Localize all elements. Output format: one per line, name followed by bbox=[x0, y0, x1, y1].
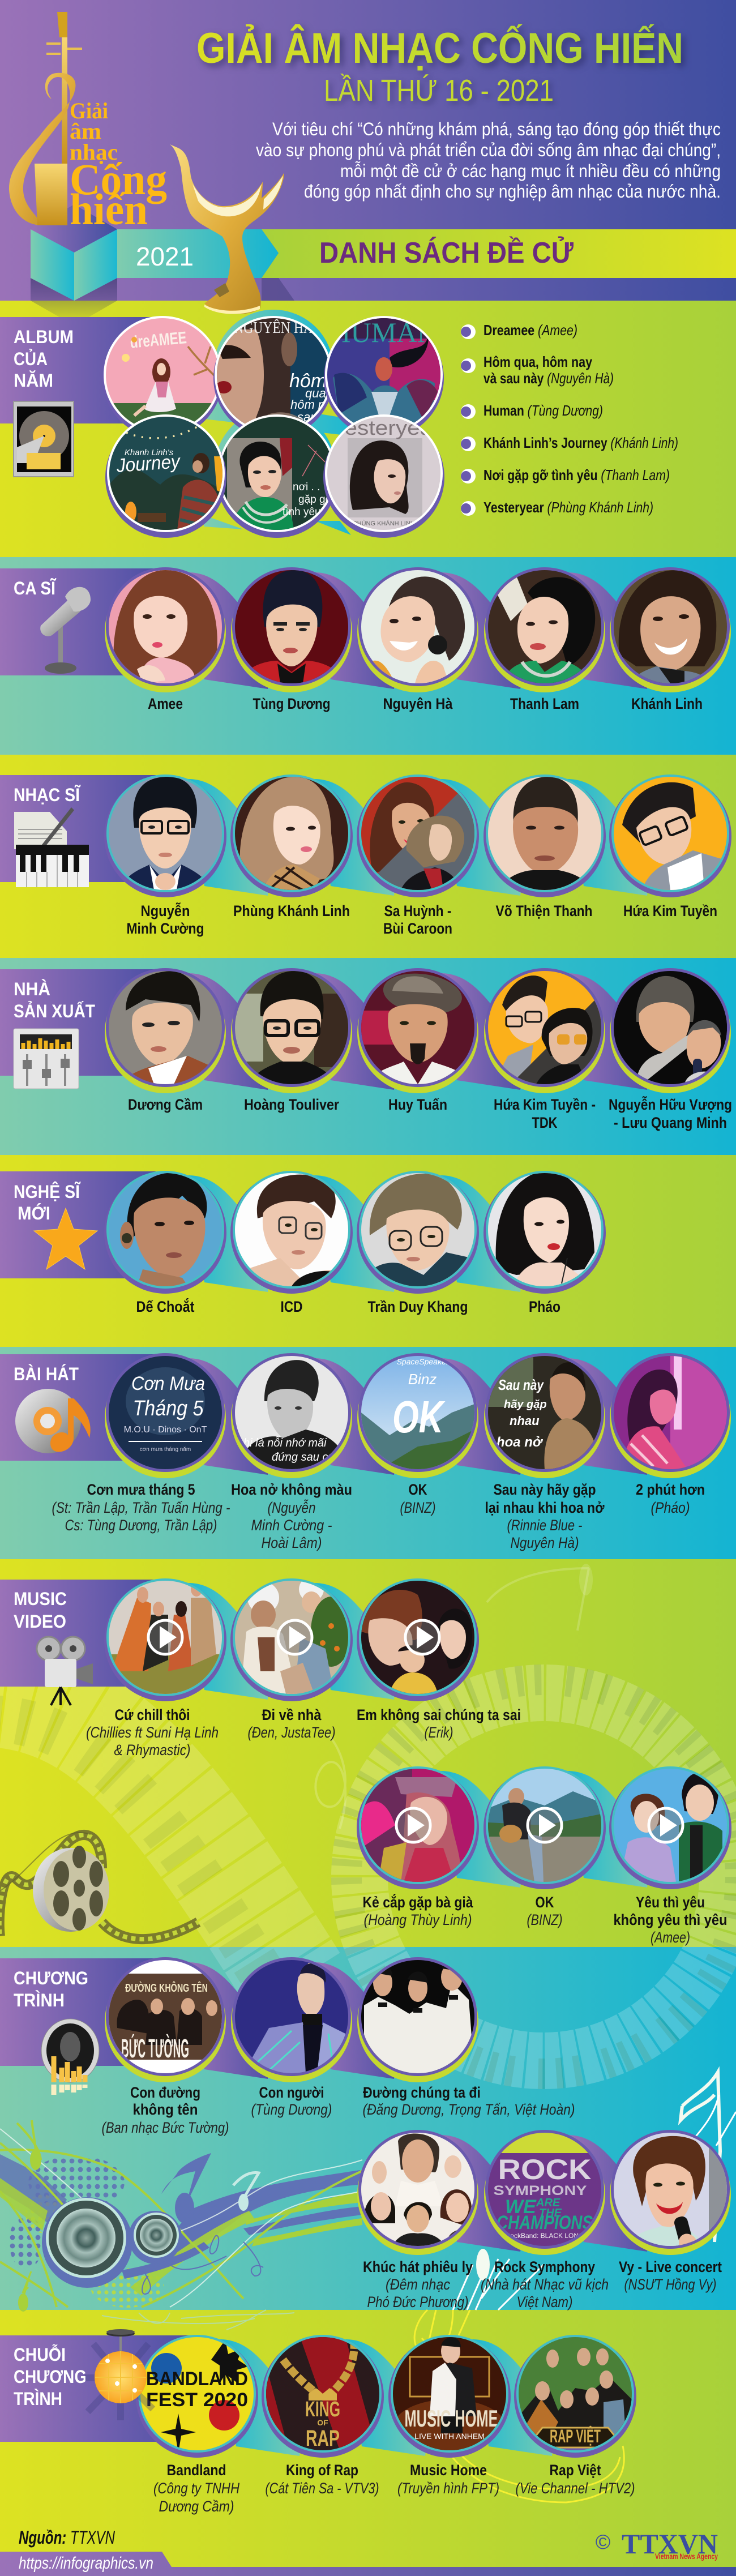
singer names: Khánh Linh bbox=[631, 695, 703, 712]
portrait: Nguyễn Minh Cường bbox=[104, 774, 226, 897]
heading bbox=[14, 1968, 88, 2010]
nominee list: Khánh Linh’s Journey (Khánh Linh) bbox=[483, 434, 678, 451]
new artist names: ICD bbox=[281, 1298, 302, 1315]
series titles: Music Home bbox=[410, 2462, 487, 2479]
producer names: TDK bbox=[532, 1114, 558, 1131]
album cover: Nơi gặp gỡ tình yêu: gặp gỡ bbox=[298, 494, 332, 506]
album cover: Nơi gặp gỡ tình yêu: nơi . . bbox=[293, 481, 320, 493]
icon: mixer bbox=[14, 1029, 79, 1089]
cover: OK bbox=[357, 1353, 478, 1478]
connectors between portraits bbox=[188, 973, 652, 1090]
poster: Bandland: FEST 2020 bbox=[146, 2389, 248, 2411]
music video titles: (Chillies ft Suni Hạ Linh bbox=[86, 1724, 219, 1741]
composer names: Bùi Caroon bbox=[383, 920, 452, 937]
cover: Sau này hãy gặp lại nhau khi hoa nở: hãy gặp bbox=[504, 1398, 547, 1411]
cover: Sau này hãy gặp lại nhau khi hoa nở: hoa nở bbox=[497, 1435, 544, 1450]
section ribbon bbox=[0, 969, 156, 1076]
music video titles: (Amee) bbox=[651, 1929, 690, 1946]
panel: programme series bbox=[0, 2310, 736, 2567]
nominee list: Human (Tùng Dương) bbox=[483, 402, 603, 419]
album cover: Dreamee: dreAMEE bbox=[129, 328, 187, 352]
award logo: Giải bbox=[70, 98, 108, 123]
poster: Con đường không tên bbox=[105, 1957, 226, 2082]
composer names: Võ Thiện Thanh bbox=[496, 902, 592, 919]
portrait: Võ Thiện Thanh bbox=[483, 774, 606, 897]
portrait: Hoàng Touliver bbox=[231, 968, 352, 1093]
poster: Rock Symphony: ROCK bbox=[498, 2154, 591, 2185]
album cover: Dreamee bbox=[104, 316, 218, 428]
decorative swirl and speakers at the bottom of the programme band bbox=[0, 2072, 736, 2502]
icon: gold record plaque bbox=[14, 401, 74, 477]
panel: header bbox=[0, 0, 736, 326]
album cover: Hôm qua, hôm nay và sau này: NGUYÊN HÀ bbox=[234, 319, 314, 337]
panel: producers bbox=[0, 958, 736, 1155]
year: 2021 bbox=[136, 242, 194, 271]
panel: songs bbox=[0, 1347, 736, 1559]
panel: programmes bbox=[0, 1947, 736, 2310]
heading: NHÀ bbox=[14, 979, 50, 999]
poster: Bandland: BANDLAND bbox=[146, 2368, 248, 2390]
heading: CHUỖI bbox=[14, 2344, 66, 2365]
composer names: Minh Cường bbox=[127, 920, 204, 937]
song titles: (St: Trần Lập, Trần Tuấn Hùng - bbox=[52, 1499, 230, 1516]
section ribbon bbox=[0, 2335, 192, 2442]
album cover: Hôm qua, hôm nay và sau này: qua bbox=[305, 386, 326, 400]
music video titles: (BINZ) bbox=[527, 1911, 563, 1928]
album cover: Khánh Linh's Journey: Khanh Linh's bbox=[125, 448, 174, 457]
icon: film camera bbox=[37, 1637, 93, 1705]
producer names: Hứa Kim Tuyền - bbox=[494, 1096, 596, 1113]
series titles: (Công ty TNHH bbox=[153, 2480, 239, 2497]
icon: sheet music and piano bbox=[14, 807, 89, 887]
new artist names bbox=[136, 1298, 560, 1315]
album cover: Yesteryear bbox=[323, 414, 444, 538]
portrait: ICD bbox=[230, 1171, 353, 1294]
cover: Hoa nở không màu: hi là nỗi nhớ mãi bbox=[243, 1436, 327, 1449]
section ribbon bbox=[0, 1354, 156, 1461]
film reel and film strip bbox=[0, 1833, 198, 1939]
poster: Con đường không tên: ĐƯỜNG KHÔNG TÊN bbox=[125, 1981, 208, 1995]
song titles: Sau này hãy gặp bbox=[494, 1481, 596, 1498]
website address: https://infographics.vn bbox=[19, 2554, 153, 2573]
poster: Bandland bbox=[136, 2335, 258, 2458]
programme titles: (Nhà hát Nhạc vũ kịch bbox=[481, 2276, 609, 2293]
album cover: Nơi gặp gỡ tình yêu bbox=[221, 414, 331, 538]
producer names bbox=[128, 1096, 732, 1131]
panel: composers bbox=[0, 774, 731, 936]
composer names: Phùng Khánh Linh bbox=[233, 902, 350, 919]
heading: CHƯƠNG bbox=[14, 2367, 87, 2387]
section ribbon bbox=[0, 1580, 156, 1687]
music video titles: Cứ chill thôi bbox=[114, 1706, 190, 1723]
series titles bbox=[153, 2462, 635, 2515]
TTXVN logo: TTXVN bbox=[622, 2528, 718, 2560]
singer names: Thanh Lam bbox=[510, 695, 579, 712]
section ribbon bbox=[0, 568, 156, 675]
cover: Hoa nở không màu bbox=[231, 1353, 352, 1478]
award logo: Cống bbox=[70, 155, 167, 204]
music video titles: Em không sai chúng ta sai bbox=[357, 1706, 521, 1723]
music video titles: OK bbox=[536, 1894, 554, 1911]
series titles: (Cát Tiên Sa - VTV3) bbox=[265, 2480, 379, 2497]
connectors between posters bbox=[188, 1962, 652, 2252]
heading: NHẠC SĨ bbox=[14, 785, 81, 805]
award logo bbox=[9, 12, 167, 234]
portrait: Nguyên Hà bbox=[357, 567, 478, 692]
producer names: Hoàng Touliver bbox=[244, 1096, 339, 1113]
section ribbon bbox=[0, 1958, 156, 2066]
icon: disco ball bbox=[85, 2329, 153, 2420]
music video titles: Kẻ cắp gặp bà già bbox=[362, 1893, 473, 1911]
cover: Sau này hãy gặp lại nhau khi hoa nở: Sau này bbox=[498, 1376, 544, 1393]
nominee list bbox=[461, 322, 678, 516]
cover: OK: SpaceSpeakers bbox=[397, 1357, 452, 1366]
panel: music video bbox=[0, 1559, 736, 1947]
album cover: Human bbox=[324, 316, 444, 438]
singer names: Tùng Dương bbox=[253, 695, 331, 712]
TTXVN logo: © bbox=[596, 2530, 610, 2553]
album cover: Human: HUMAN bbox=[330, 316, 438, 348]
music video titles: (Erik) bbox=[425, 1724, 453, 1741]
poster: Music Home: LIVE WITH ANHEM bbox=[414, 2432, 485, 2441]
panel: album of the year bbox=[0, 310, 678, 538]
heading bbox=[14, 1182, 81, 1223]
nominee list: Yesteryear (Phùng Khánh Linh) bbox=[483, 499, 653, 516]
album cover: Yesteryear: yesteryear bbox=[333, 416, 440, 439]
banner: cube, year ribbon and list heading bbox=[31, 204, 736, 326]
new artist names: Trần Duy Khang bbox=[368, 1298, 468, 1315]
icon: gold star bbox=[34, 1208, 97, 1269]
poster: Music Home: MUSIC HOME bbox=[404, 2405, 498, 2432]
heading: TRÌNH bbox=[14, 2389, 62, 2409]
cover: Cơn mưa tháng 5 bbox=[105, 1353, 226, 1478]
heading: TRÌNH bbox=[14, 1990, 65, 2010]
programme titles: (Ban nhạc Bức Tường) bbox=[102, 2119, 229, 2136]
panel: new artists bbox=[0, 1155, 736, 1347]
source line: Nguồn: TTXVN bbox=[19, 2527, 115, 2548]
heading bbox=[14, 1589, 67, 1632]
portrait: Hứa Kim Tuyền bbox=[609, 774, 731, 897]
cover: Sau này hãy gặp lại nhau khi hoa nở: nhau bbox=[510, 1414, 540, 1428]
portrait: Thanh Lam bbox=[484, 567, 605, 692]
poster: Rock Symphony: SYMPHONY bbox=[494, 2183, 587, 2198]
cover: Cơn mưa tháng 5: cơn mưa tháng năm bbox=[140, 1447, 191, 1453]
poster: Music Home bbox=[388, 2335, 511, 2458]
portrait: Trần Duy Khang bbox=[357, 1171, 479, 1294]
poster: Rock Symphony: THE bbox=[539, 2207, 562, 2219]
nominee list: Dreamee (Amee) bbox=[483, 322, 577, 339]
series titles: Dương Cầm) bbox=[159, 2498, 234, 2515]
song titles: Hoa nở không màu bbox=[231, 1481, 352, 1498]
icon: gold trophy bbox=[170, 144, 284, 314]
music video titles: (Đen, JustaTee) bbox=[248, 1724, 335, 1741]
song titles: Minh Cường - bbox=[251, 1517, 332, 1534]
nominee list: Hôm qua, hôm nay bbox=[483, 353, 592, 370]
poster: Con đường không tên: BỨC TƯỜNG bbox=[121, 2034, 189, 2063]
album cover: Khánh Linh's Journey: Journey bbox=[115, 451, 182, 477]
poster: Rap Việt bbox=[514, 2335, 636, 2458]
poster: Đường chúng ta đi bbox=[357, 1957, 478, 2082]
portrait: Phùng Khánh Linh bbox=[230, 774, 353, 897]
section ribbon bbox=[0, 775, 156, 882]
video still: Kẻ cắp gặp bà già bbox=[357, 1766, 479, 1889]
cover: Sau này hãy gặp lại nhau khi hoa nở bbox=[484, 1353, 605, 1478]
video still: Em không sai chúng ta sai bbox=[357, 1578, 479, 1701]
icon: CD with music note bbox=[15, 1389, 91, 1453]
heading bbox=[14, 2344, 87, 2409]
cover: 2 phút hơn bbox=[610, 1353, 731, 1478]
poster: Con người bbox=[231, 1957, 352, 2082]
portrait: Tùng Dương bbox=[231, 567, 352, 692]
footer bbox=[0, 2527, 736, 2576]
heading: MUSIC bbox=[14, 1589, 67, 1609]
heading: CHƯƠNG bbox=[14, 1968, 88, 1988]
portrait: Huy Tuấn bbox=[357, 968, 478, 1093]
award logo: hiến bbox=[70, 185, 148, 234]
music video titles bbox=[86, 1706, 727, 1946]
video still: OK bbox=[483, 1766, 606, 1889]
portrait: Dế Choắt bbox=[104, 1171, 226, 1294]
series titles: Bandland bbox=[166, 2462, 226, 2479]
portrait: Sa Huỳnh and Bùi Caroon bbox=[357, 774, 479, 897]
poster: Rock Symphony: CHAMPIONS bbox=[497, 2212, 593, 2233]
poster: King of Rap bbox=[262, 2335, 384, 2458]
poster: King of Rap: OF bbox=[317, 2418, 328, 2427]
poster: Vy - Live concert bbox=[610, 2130, 731, 2255]
list heading: DANH SÁCH ĐỀ CỬ bbox=[319, 236, 574, 269]
song titles: Hoài Lâm) bbox=[262, 1534, 322, 1551]
composer names: Nguyễn bbox=[140, 902, 190, 919]
music video titles: & Rhymastic) bbox=[114, 1741, 190, 1758]
album cover: Hôm qua, hôm nay và sau này: sau này bbox=[297, 410, 342, 424]
heading: VIDEO bbox=[14, 1611, 66, 1632]
cover: OK: Binz bbox=[408, 1371, 437, 1388]
programme titles: Con đường bbox=[130, 2084, 200, 2101]
song titles bbox=[52, 1481, 705, 1551]
series titles: Rap Việt bbox=[549, 2462, 601, 2479]
poster: Rock Symphony: RockBand: BLACK LONG bbox=[506, 2232, 584, 2240]
cover: Cơn mưa tháng 5: Cơn Mưa bbox=[131, 1373, 205, 1394]
programme titles: Khúc hát phiêu ly bbox=[363, 2258, 473, 2275]
poster: Rap Việt: RAP VIỆT bbox=[550, 2426, 601, 2446]
poster: Rock Symphony: WE bbox=[505, 2196, 537, 2218]
poster: King of Rap: KING bbox=[305, 2398, 340, 2421]
series titles: (Vie Channel - HTV2) bbox=[515, 2480, 635, 2497]
song titles: Nguyên Hà) bbox=[511, 1534, 579, 1551]
series titles: (Truyền hình FPT) bbox=[397, 2480, 499, 2497]
song titles: (BINZ) bbox=[400, 1499, 436, 1516]
website tab bbox=[0, 2552, 736, 2576]
singer names: Amee bbox=[148, 695, 183, 712]
new artist names: Dế Choắt bbox=[136, 1298, 195, 1315]
connectors between posters bbox=[220, 2339, 557, 2456]
programme titles: (Tùng Dương) bbox=[251, 2101, 332, 2118]
programme titles: Con người bbox=[259, 2084, 324, 2101]
cover: Hoa nở không màu: đứng sau cuộc bbox=[272, 1451, 346, 1464]
heading: CA SĨ bbox=[14, 578, 57, 598]
connectors between portraits bbox=[188, 572, 652, 689]
heading: NĂM bbox=[14, 370, 53, 391]
music video titles: Yêu thì yêu bbox=[636, 1894, 705, 1911]
portrait: Hứa Kim Tuyền and TDK bbox=[484, 968, 605, 1093]
programme titles: (Đăng Dương, Trọng Tấn, Việt Hoàn) bbox=[362, 2101, 575, 2118]
poster: Rock Symphony: ARE bbox=[536, 2197, 560, 2209]
poster: Khúc hát phiêu ly bbox=[357, 2130, 478, 2255]
song titles: 2 phút hơn bbox=[636, 1481, 705, 1498]
producer names: Huy Tuấn bbox=[388, 1096, 447, 1113]
song titles: (Rinnie Blue - bbox=[507, 1517, 582, 1534]
composer names bbox=[127, 902, 717, 937]
connectors between portraits bbox=[188, 779, 652, 896]
song titles: Cơn mưa tháng 5 bbox=[87, 1481, 195, 1498]
song titles: OK bbox=[409, 1481, 427, 1498]
section ribbon bbox=[0, 1171, 156, 1278]
heading: MỚI bbox=[18, 1203, 50, 1223]
series titles: King of Rap bbox=[286, 2462, 358, 2479]
programme titles: Rock Symphony bbox=[494, 2258, 595, 2275]
heading bbox=[14, 327, 74, 391]
nominee list: Nơi gặp gỡ tình yêu (Thanh Lam) bbox=[483, 467, 670, 483]
singer names: Nguyên Hà bbox=[383, 695, 453, 712]
programme titles: Phó Đức Phương) bbox=[367, 2293, 469, 2310]
song titles: lại nhau khi hoa nở bbox=[485, 1499, 605, 1516]
heading: NGHỆ SĨ bbox=[14, 1182, 81, 1202]
video still: Cứ chill thôi bbox=[104, 1578, 226, 1701]
heading: BÀI HÁT bbox=[14, 1364, 79, 1384]
new artist names: Pháo bbox=[529, 1298, 560, 1315]
programme titles: (Đêm nhạc bbox=[386, 2276, 450, 2293]
heading: SẢN XUẤT bbox=[14, 1001, 95, 1021]
programme titles: Đường chúng ta đi bbox=[363, 2084, 481, 2101]
video still: Đi về nhà bbox=[230, 1577, 353, 1701]
cover: Cơn mưa tháng 5: M.O.U · Dinos · OnT bbox=[124, 1425, 207, 1435]
section ribbon bbox=[0, 317, 159, 423]
portrait: Khánh Linh bbox=[610, 567, 731, 692]
composer names: Sa Huỳnh - bbox=[384, 902, 452, 919]
music video titles: Đi về nhà bbox=[262, 1706, 322, 1723]
connectors behind album covers bbox=[204, 310, 351, 535]
programme titles bbox=[102, 2084, 722, 2310]
poster: Rock Symphony bbox=[484, 2130, 605, 2255]
portrait: Pháo bbox=[483, 1170, 606, 1294]
icon: microphone bbox=[40, 587, 91, 674]
poster: King of Rap: RAP bbox=[306, 2426, 340, 2451]
album cover: Nơi gặp gỡ tình yêu: tình yêu bbox=[283, 506, 321, 518]
song titles: (Nguyễn bbox=[267, 1499, 316, 1516]
icon: speaker with equaliser bbox=[41, 2019, 99, 2095]
singer names bbox=[148, 695, 703, 712]
connectors between covers bbox=[188, 1358, 652, 1475]
portrait: Nguyễn Hữu Vượng and Lưu Quang Minh bbox=[610, 968, 731, 1093]
intro paragraph bbox=[256, 119, 721, 202]
subtitle: LẦN THỨ 16 - 2021 bbox=[324, 74, 554, 108]
composer names: Hứa Kim Tuyền bbox=[623, 902, 717, 919]
connectors between portraits bbox=[188, 1175, 525, 1292]
video still: Yêu thì yêu không yêu thì yêu bbox=[609, 1766, 731, 1889]
portrait: Dương Cầm bbox=[105, 968, 226, 1093]
panel: singers bbox=[0, 567, 731, 712]
album cover: Khánh Linh's Journey bbox=[105, 414, 228, 538]
connectors between stills bbox=[188, 1583, 652, 1888]
album cover: Yesteryear: PHÙNG KHÁNH LINH bbox=[353, 520, 415, 527]
programme titles: không tên bbox=[132, 2101, 198, 2118]
album cover: Hôm qua, hôm nay và sau này: hôm nay bbox=[290, 397, 339, 412]
award logo: âm bbox=[70, 118, 101, 144]
heading: ALBUM bbox=[14, 327, 74, 347]
song titles: (Pháo) bbox=[651, 1499, 690, 1516]
heading bbox=[14, 979, 95, 1021]
portrait: Amee bbox=[105, 567, 226, 692]
album cover: Hôm qua, hôm nay và sau này: hôm bbox=[289, 370, 327, 392]
cover: OK: OK bbox=[392, 1392, 446, 1442]
song titles: Cs: Tùng Dương, Trần Lập) bbox=[65, 1517, 217, 1534]
music video titles: (Hoàng Thùy Linh) bbox=[363, 1911, 472, 1928]
award logo: nhạc bbox=[70, 139, 118, 165]
nominee list: và sau này (Nguyên Hà) bbox=[483, 370, 614, 387]
producer names: Dương Cầm bbox=[128, 1096, 203, 1113]
cover: Cơn mưa tháng 5: Tháng 5 bbox=[132, 1397, 204, 1420]
programme titles: Việt Nam) bbox=[516, 2293, 573, 2310]
heading: CỦA bbox=[14, 349, 48, 369]
album cover: Hôm qua, hôm nay và sau này bbox=[213, 316, 328, 428]
